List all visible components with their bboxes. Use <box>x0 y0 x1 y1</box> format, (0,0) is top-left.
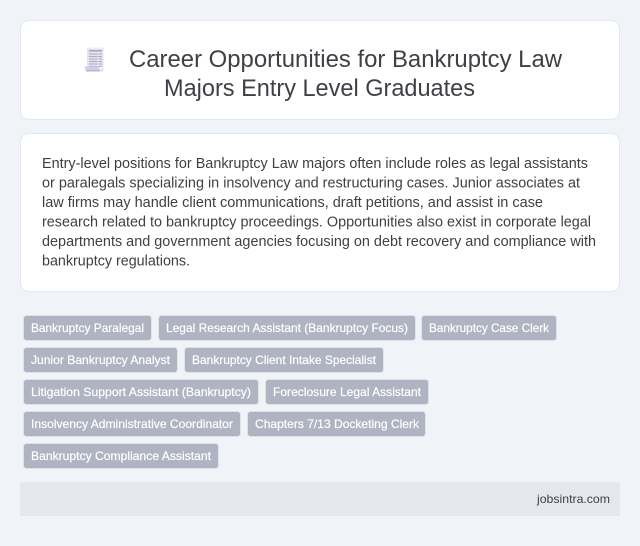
tag: Litigation Support Assistant <box>24 380 258 404</box>
text block: description: bankruptcy regulations. <box>42 254 190 270</box>
heading: line one: Career Opportunities for Bankruptcy Law <box>129 46 563 73</box>
tag: Bankruptcy Client Intake Specialist <box>184 348 384 372</box>
tag: Bankruptcy Compliance Assistant <box>24 444 218 468</box>
text block: description: law firms may handle client communications, draft petitions, and assist in case <box>42 195 543 211</box>
heading: line two: Majors Entry Level Graduates <box>164 75 475 102</box>
text block: description: or paralegals specializing in insolvency and restructuring cases. Junior associates at <box>42 176 580 192</box>
tag: Litigation Support Assistant: Litigation Support Assistant (Bankruptcy) <box>31 385 251 399</box>
tag: Legal Research Assistant: Legal Research Assistant (Bankruptcy Focus) <box>166 321 408 335</box>
tag: Legal Research Assistant <box>158 316 416 340</box>
tag: Junior Bankruptcy Analyst <box>24 348 178 372</box>
tag: Chapters 7/13 Docketing Clerk <box>248 412 426 436</box>
footer: site name: jobsintra.com <box>536 492 610 506</box>
tag: Insolvency Administrative Coordinator: Insolvency Administrative Coordinator <box>31 417 233 431</box>
footer bar <box>20 482 620 516</box>
tag: Bankruptcy Paralegal <box>24 316 152 340</box>
text block: description: research related to bankruptcy proceedings. Opportunities also exist in corporate legal <box>42 214 591 230</box>
panel: description <box>20 134 620 292</box>
tag: Chapters 7/13 Docketing Clerk: Chapters 7/13 Docketing Clerk <box>255 417 420 431</box>
tag: Bankruptcy Client Intake Specialist: Bankruptcy Client Intake Specialist <box>192 353 377 367</box>
tag: Bankruptcy Case Clerk <box>422 316 556 340</box>
tag: Foreclosure Legal Assistant <box>266 380 428 404</box>
tag: Bankruptcy Paralegal: Bankruptcy Paralegal <box>31 321 144 335</box>
icon: document scroll <box>84 48 104 72</box>
panel: job role tags <box>24 316 556 468</box>
text block: description: departments and government agencies focusing on debt recovery and compliance with <box>42 234 596 250</box>
tag: Bankruptcy Case Clerk: Bankruptcy Case Clerk <box>429 321 550 335</box>
text block: description: Entry-level positions for Bankruptcy Law majors often include roles as legal assistants <box>42 156 588 172</box>
tag: Insolvency Administrative Coordinator <box>24 412 240 436</box>
text block: description <box>42 156 596 270</box>
tag: Bankruptcy Compliance Assistant: Bankruptcy Compliance Assistant <box>31 449 212 463</box>
tag: Foreclosure Legal Assistant: Foreclosure Legal Assistant <box>273 385 422 399</box>
panel: title header <box>20 20 620 120</box>
tag: Junior Bankruptcy Analyst: Junior Bankruptcy Analyst <box>31 353 171 367</box>
